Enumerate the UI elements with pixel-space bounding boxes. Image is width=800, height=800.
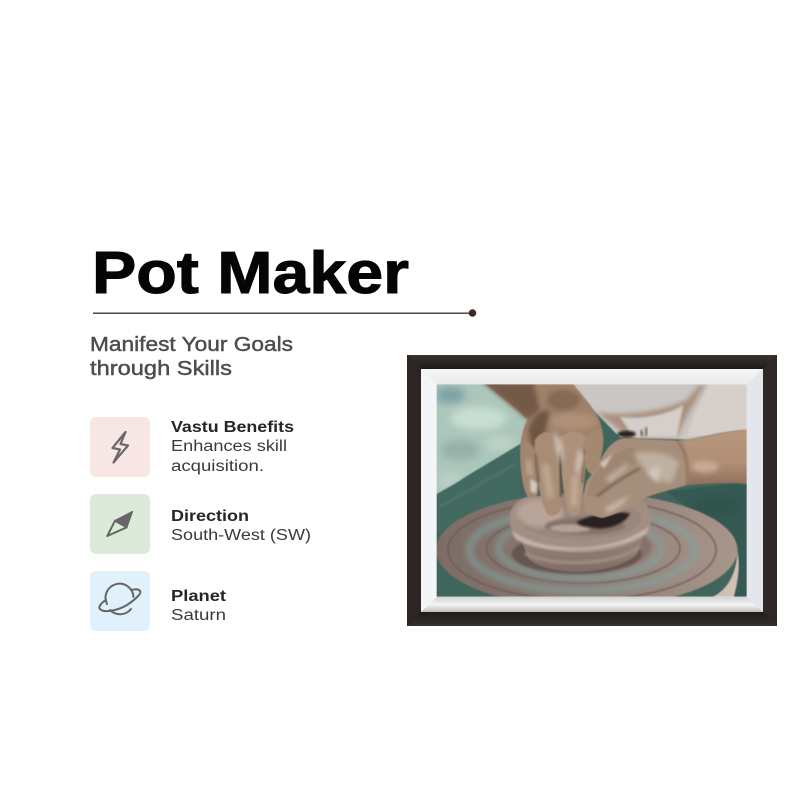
title divider with dot [93,309,476,317]
text: vastu benefits [171,419,294,475]
icon: saturn [90,571,150,631]
text: planet: Planet [171,588,226,605]
back hand [482,382,603,516]
title: Pot Maker [92,240,409,306]
blurred background [433,382,532,496]
fingers [520,443,538,498]
shirt [568,382,750,439]
clay pot [509,496,651,574]
highlights [554,430,563,465]
panel: direction [90,494,311,554]
front hand and forearm [584,429,750,518]
text: direction: Direction [171,508,249,525]
text: vastu benefits: acquisition. [171,458,264,475]
subtitle [90,333,293,380]
fingers [598,449,634,492]
panel: vastu benefits [90,417,294,477]
text: direction [171,508,311,544]
picture frame [407,355,777,626]
text: direction: South-West (SW) [171,527,311,544]
icon: compass needle [90,494,150,554]
photo: hands on pottery wheel [433,382,750,607]
icon: lightning bolt [90,417,150,477]
panel: planet [90,571,226,631]
subtitle: through Skills [90,357,232,380]
text: vastu benefits: Vastu Benefits [171,419,294,436]
text: planet: Saturn [171,607,226,624]
wheel [436,493,739,607]
text: planet [171,588,226,624]
text: vastu benefits: Enhances skill [171,438,287,455]
subtitle: Manifest Your Goals [90,333,293,356]
